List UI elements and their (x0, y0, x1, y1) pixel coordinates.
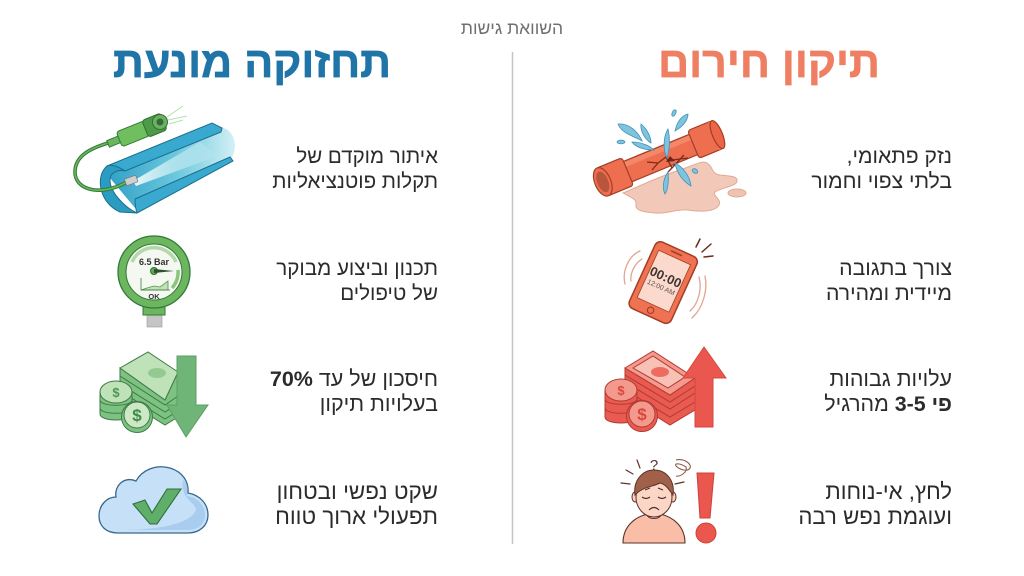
icon: cloud with check mark (99, 467, 208, 533)
icon: stressed person: ? (650, 457, 658, 474)
icon: money with rising arrow (605, 347, 726, 432)
icon: ringing phone: 12:00 AM (646, 279, 676, 297)
text: controlled planning: תכנון וביצוע מבוקר (276, 257, 438, 280)
text: savings: בעלויות תיקון (320, 392, 438, 416)
text: peace of mind (275, 479, 438, 529)
text: immediate response: מיידית ומהירה (826, 282, 952, 305)
subtitle: השוואת גישות (461, 18, 563, 38)
text: immediate response: צורך בתגובה (839, 257, 952, 280)
text: savings: חיסכון של עד 70% (270, 367, 438, 391)
icon: money with falling arrow (100, 352, 208, 437)
text: stress: לחץ, אי-נוחות (825, 479, 952, 504)
heading: emergency repair: תיקון חירום (658, 39, 880, 87)
text: peace of mind: שקט נפשי ובטחון (277, 479, 438, 504)
icon: pressure gauge: 6.5 Bar (139, 257, 170, 267)
text: savings (270, 367, 438, 416)
icon: money with falling arrow: $ (132, 406, 142, 425)
icon: pressure gauge (118, 236, 190, 327)
text: early detection (272, 145, 438, 193)
text: peace of mind: תפעולי ארוך טווח (275, 504, 438, 529)
heading: preventive maintenance: תחזוקה מונעת (113, 39, 391, 87)
icon: money with rising arrow: $ (617, 383, 625, 398)
icon: stressed person (621, 457, 716, 543)
icon: money with rising arrow: $ (637, 405, 647, 424)
icon: ringing phone (624, 239, 713, 325)
icon: burst pipe (590, 109, 746, 213)
text: sudden damage: נזק פתאומי, (847, 145, 952, 168)
icon: pressure gauge: OK (148, 292, 160, 301)
text: high costs: עלויות גבוהות (830, 367, 952, 391)
icon: ringing phone: 00:00 (647, 263, 684, 291)
text: stress: ועוגמת נפש רבה (798, 504, 952, 529)
text: sudden damage: בלתי צפוי וחמור (811, 170, 952, 193)
icon: pipe inspection camera (75, 106, 235, 213)
text: controlled planning (276, 257, 438, 305)
text: high costs (824, 367, 952, 416)
text: early detection: איתור מוקדם של (296, 145, 438, 168)
text: controlled planning: של טיפולים (340, 282, 438, 305)
text: high costs: פי 3-5 מהרגיל (824, 392, 952, 416)
text: sudden damage (811, 145, 952, 193)
icon: money with falling arrow: $ (112, 385, 120, 400)
text: stress (798, 479, 952, 529)
text: immediate response (826, 257, 952, 305)
text: early detection: תקלות פוטנציאליות (272, 170, 438, 193)
